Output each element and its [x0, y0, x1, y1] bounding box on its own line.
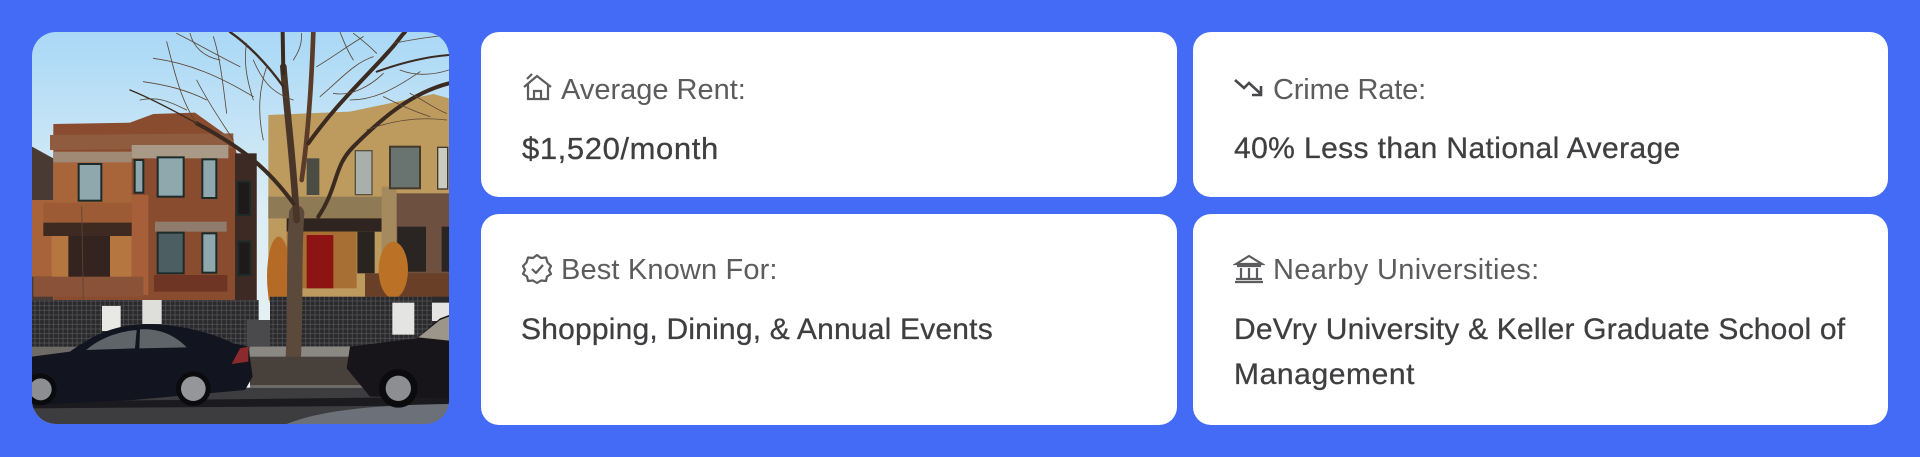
black sedan — [25, 324, 253, 406]
fence and signs — [32, 297, 449, 360]
right house — [267, 94, 449, 317]
icon: house — [523, 73, 552, 100]
value: nearby universities — [1234, 313, 1846, 391]
heading: crime rate: Crime Rate: — [1273, 74, 1426, 106]
icon: verified badge — [522, 254, 552, 284]
heading: nearby universities: Nearby Universities: — [1273, 254, 1539, 286]
panel: nearby universities — [1193, 214, 1888, 425]
left house — [32, 113, 257, 300]
photo: brick two-flat houses with bare tree and parked cars — [32, 32, 449, 424]
icon: university building — [1233, 254, 1265, 284]
panel: crime rate — [1193, 32, 1888, 197]
panel: average rent — [481, 32, 1177, 197]
value: best known for: Shopping, Dining, & Annual Events — [521, 313, 993, 346]
heading: best known for: Best Known For: — [561, 254, 778, 286]
value: average rent: $1,520/month — [522, 131, 719, 166]
dark SUV — [347, 315, 449, 408]
left house windows — [79, 157, 250, 275]
heading: average rent: Average Rent: — [561, 74, 746, 106]
value: nearby universities: Management — [1234, 358, 1415, 391]
tree — [130, 32, 449, 357]
tree twigs — [82, 32, 449, 300]
value: nearby universities: DeVry University & Keller Graduate School of — [1234, 313, 1845, 346]
street — [32, 357, 449, 424]
panel: best known for — [481, 214, 1177, 425]
icon: trending down — [1234, 79, 1262, 96]
value: crime rate: 40% Less than National Average — [1234, 132, 1681, 165]
